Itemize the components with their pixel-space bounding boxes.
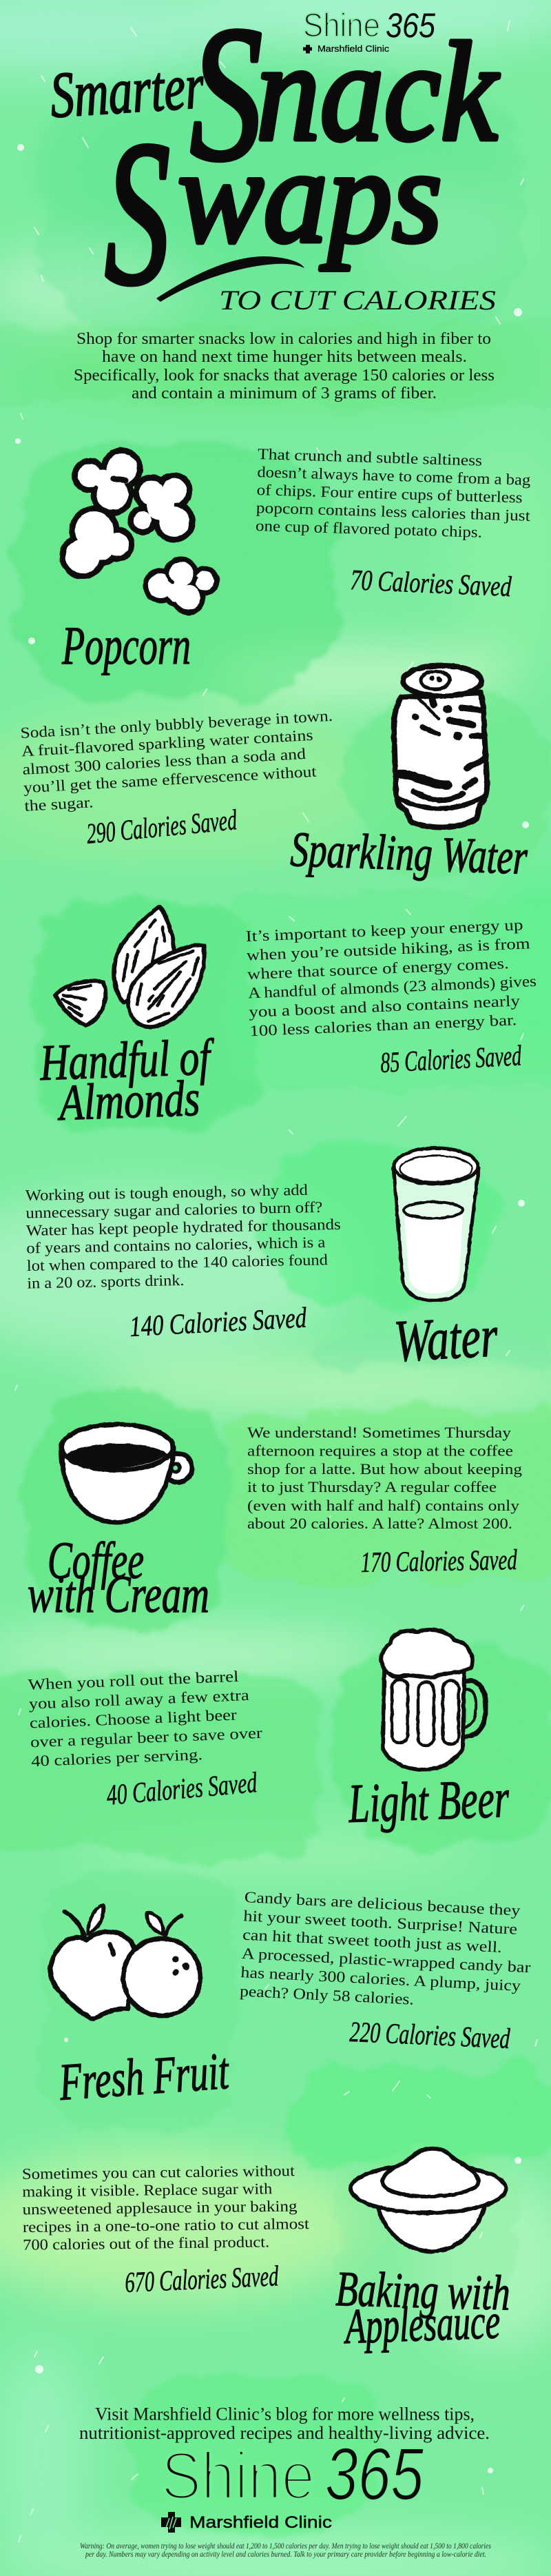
panel: handful of almonds — [39, 907, 542, 1132]
title: Smarter: Smarter — [48, 50, 206, 132]
logo: Shine365 (bottom): 365 — [325, 2432, 424, 2515]
calories saved: 140: 140 Calories Saved — [129, 1302, 308, 1343]
body text: fruit: hit your sweet tooth. Surprise! Nature — [243, 1907, 518, 1938]
title: Snack: nack — [256, 14, 499, 170]
heading: Handful of: Handful of — [39, 1029, 216, 1092]
body text: popcorn: one cup of flavored potato chips. — [256, 517, 482, 541]
calories saved: 290: 290 Calories Saved — [85, 804, 239, 850]
body text: almonds: 100 less calories than an energy bar. — [249, 1011, 517, 1039]
body text: applesauce: 700 calories out of the final product. — [23, 2233, 269, 2253]
body text: beer: you also roll away a few extra — [28, 1686, 249, 1713]
intro paragraph: Shop for smarter snacks low in calories and high in fiber to — [76, 330, 491, 348]
icon: bowl of applesauce — [351, 2149, 506, 2251]
body text: popcorn: That crunch and subtle saltiness — [258, 445, 482, 469]
call to action text: nutritionist-approved recipes and healthy-living advice. — [79, 2423, 490, 2443]
logo: Shine365 Marshfield Clinic (top): 365 — [386, 6, 435, 45]
body text: applesauce: recipes in a one-to-one ratio to cut almost — [23, 2215, 310, 2236]
warning fine print: per day. Numbers may vary depending on activity level and calories burned. Talk to your primary care provider before beginning a low-calorie diet. — [85, 2551, 486, 2559]
title: Swaps: waps — [178, 122, 442, 271]
heading: Fresh Fruit: Fresh Fruit — [57, 2042, 231, 2112]
body text: water: in a 20 oz. sports drink. — [27, 1271, 185, 1291]
title: Swaps: S — [105, 99, 170, 327]
body text: almonds: where that source of energy comes. — [247, 954, 509, 983]
heading: Almonds: Almonds — [56, 1070, 200, 1132]
body text: almonds: It’s important to keep your energy up — [245, 916, 523, 945]
panel: water — [25, 1148, 499, 1374]
panel: sparkling water — [20, 666, 529, 885]
heading: Popcorn: Popcorn — [61, 615, 191, 675]
heading: Coffee: Coffee — [48, 1532, 144, 1590]
body text: fruit: A processed, plastic-wrapped candy bar — [241, 1945, 532, 1976]
intro paragraph: have on hand next time hunger hits between meals. — [102, 348, 467, 366]
icon: glass of water — [393, 1148, 479, 1300]
panel: fresh fruit — [50, 1888, 538, 2112]
panel: baking with applesauce — [22, 2149, 511, 2354]
body text: popcorn: doesn’t always have to come from a bag — [257, 463, 531, 489]
body text: almonds: when you’re outside hiking, as is from — [246, 934, 531, 963]
body text: sparkling water: you’ll get the same effervescence without — [23, 763, 318, 796]
body text: coffee: about 20 calories. A latte? Almost 200. — [247, 1515, 512, 1532]
icon: almonds — [55, 907, 205, 1027]
intro paragraph: and contain a minimum of 3 grams of fiber. — [132, 385, 437, 402]
body text: applesauce: Sometimes you can cut calories without — [22, 2162, 295, 2183]
body text: popcorn: of chips. Four entire cups of butterless — [256, 481, 523, 506]
panel: light beer — [28, 1630, 510, 1834]
body text: coffee: afternoon requires a stop at the coffee — [247, 1442, 513, 1460]
heading: with Cream: with Cream — [28, 1566, 209, 1624]
panel: popcorn — [61, 445, 536, 675]
body text: beer: calories. Choose a light beer — [29, 1706, 238, 1732]
subtitle: to cut calories: TO CUT CALORIES — [219, 285, 496, 316]
logo: Marshfield Clinic (bottom) — [161, 2512, 332, 2533]
icon: beer mug — [382, 1630, 486, 1770]
logo: Shine365 Marshfield Clinic (top): Shine — [303, 8, 380, 44]
body text: beer: When you roll out the barrel — [28, 1668, 239, 1693]
heading: Water: Water — [393, 1302, 499, 1374]
body text: coffee: (even with half and half) contains only — [247, 1497, 520, 1514]
logo: Marshfield Clinic (bottom): Marshfield Clinic — [189, 2513, 332, 2532]
body text: sparkling water: the sugar. — [24, 793, 94, 815]
body text: applesauce: unsweetened applesauce in your baking — [22, 2198, 298, 2218]
icon: soda can — [394, 666, 487, 828]
body text: sparkling water: Soda isn’t the only bubbly beverage in town. — [20, 707, 333, 742]
body text: beer: over a regular beer to save over — [30, 1724, 263, 1750]
icon: coffee cup — [61, 1424, 192, 1522]
logo: Shine365 Marshfield Clinic (top) — [303, 6, 435, 54]
intro paragraph: Specifically, look for snacks that average 150 calories or less — [74, 367, 495, 385]
body text: beer: 40 calories per serving. — [31, 1746, 202, 1770]
body text: coffee: shop for a latte. But how about keeping — [247, 1460, 522, 1478]
title swash underline — [156, 256, 304, 302]
icon: apple and peach — [50, 1905, 200, 2018]
body text: water: lot when compared to the 140 calories found — [27, 1251, 328, 1274]
body text: fruit: peach? Only 58 calories. — [240, 1982, 415, 2008]
calories saved: 670: 670 Calories Saved — [124, 2260, 280, 2299]
body text: water: Working out is tough enough, so why add — [25, 1181, 308, 1204]
calories saved: 40: 40 Calories Saved — [105, 1767, 259, 1812]
body text: fruit: has nearly 300 calories. A plump, juicy — [240, 1963, 522, 1994]
body text: water: Water has kept people hydrated for thousands — [26, 1216, 341, 1239]
body text: sparkling water: almost 300 calories less than a soda and — [22, 745, 306, 778]
body text: water: unnecessary sugar and calories to burn off? — [25, 1198, 323, 1221]
body text: sparkling water: A fruit-flavored sparkling water contains — [21, 726, 313, 759]
body text: fruit: Candy bars are delicious because they — [244, 1888, 521, 1919]
body text: almonds: A handful of almonds (23 almonds) gives — [248, 972, 537, 1001]
body text: fruit: can hit that sweet tooth just as well. — [242, 1926, 502, 1956]
body text: coffee: We understand! Sometimes Thursday — [247, 1424, 512, 1441]
footer — [79, 2404, 493, 2559]
panel: coffee with cream — [28, 1424, 526, 1624]
logo: Shine365 (bottom) — [161, 2432, 424, 2515]
body text: applesauce: making it visible. Replace sugar with — [22, 2180, 272, 2200]
body text: almonds: you a boost and also contains nearly — [249, 992, 521, 1021]
logo: Shine365 Marshfield Clinic (top): Marshfield Clinic — [318, 44, 389, 54]
call to action text: Visit Marshfield Clinic’s blog for more wellness tips, — [95, 2404, 475, 2424]
body text: coffee: it to just Thursday? A regular coffee — [247, 1478, 497, 1495]
body text: popcorn: popcorn contains less calories than just — [256, 499, 531, 524]
logo: Shine365 (bottom): Shine — [161, 2438, 315, 2513]
body text: water: of years and contains no calories, which is a — [26, 1234, 326, 1256]
title block — [48, 0, 499, 402]
icon: popcorn — [65, 453, 214, 610]
